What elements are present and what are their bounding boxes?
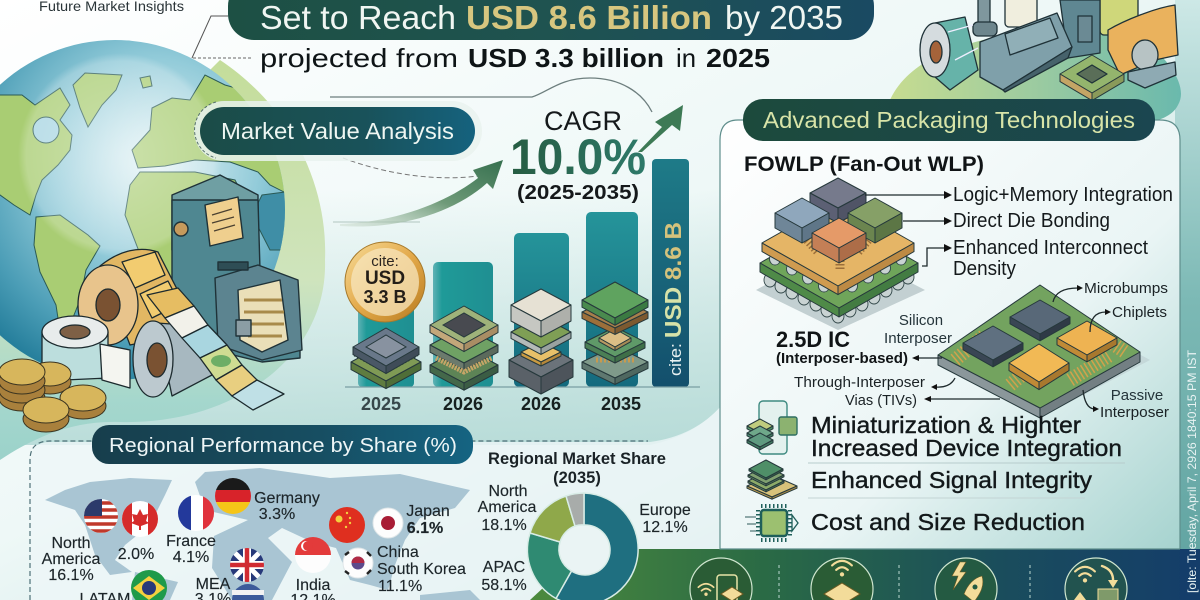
chip stack 2026 b	[509, 289, 573, 394]
divider	[1029, 565, 1031, 600]
segment: APAC	[527, 533, 572, 598]
orange hood	[1108, 5, 1178, 75]
globe backdrop blob	[0, 60, 325, 460]
growth arrow lower	[340, 160, 503, 227]
CAGR callout: 10.0%	[510, 129, 646, 185]
flag: USA	[84, 499, 118, 533]
donut chart	[527, 493, 638, 600]
title pill	[228, 0, 874, 40]
region labels: 4.1%	[173, 549, 209, 566]
interposer callouts: Through-Interposer	[794, 374, 925, 391]
interposer callouts: Vias (TIVs)	[845, 392, 917, 409]
footer icon 3	[935, 558, 997, 600]
coin stacks	[0, 359, 106, 432]
interposer callouts: Microbumps	[1084, 280, 1168, 297]
donut heading	[488, 450, 666, 487]
interposer callouts: Interposer	[1100, 404, 1169, 421]
region labels	[42, 490, 466, 600]
year labels: 2026	[521, 394, 561, 414]
footer band over panel edge	[1180, 549, 1200, 600]
icon: phone with chips	[747, 401, 797, 454]
subtitle: 2025	[706, 43, 770, 73]
Market Value Analysis heading	[194, 101, 482, 161]
flag: partial lower	[232, 584, 264, 600]
flag: Japan	[373, 508, 403, 538]
donut hole	[558, 524, 610, 576]
label rolls	[42, 249, 284, 410]
region labels: 16.1%	[48, 567, 94, 584]
timestamp note: [olte: Tuesday, April 7, 2926 1840:15 PM IST	[1185, 349, 1199, 593]
CAGR callout: CAGR	[544, 106, 622, 136]
flag: Brazil	[131, 570, 167, 600]
donut labels: 58.1%	[481, 577, 527, 594]
donut labels: APAC	[483, 559, 525, 576]
interposer chip diagram	[938, 285, 1150, 418]
coin value badge: 3.3 B	[363, 287, 407, 307]
region labels: India	[296, 577, 330, 594]
benefit: miniaturization: Increased Device Integration	[811, 435, 1122, 461]
coin value badge: USD	[365, 268, 405, 289]
packaging machine	[920, 0, 1178, 101]
donut labels: Europe	[639, 502, 691, 519]
interposer callouts: Silicon	[899, 312, 943, 329]
top-right machine backdrop	[888, 25, 1181, 125]
small white roll	[42, 316, 130, 388]
region labels: North	[51, 535, 91, 552]
right edge band	[1175, 0, 1200, 600]
FOWLP callouts	[865, 184, 1173, 280]
2.5D IC heading: (Interposer-based)	[776, 350, 908, 367]
chip stack 2025	[351, 328, 421, 389]
bar chart	[345, 159, 700, 414]
flag: Canada	[122, 501, 158, 537]
growth arrow upper	[638, 105, 683, 152]
interposer callouts: Chiplets	[1112, 304, 1167, 321]
segment: other	[566, 493, 584, 526]
footer band	[530, 549, 1200, 600]
region labels: 2.0%	[118, 546, 154, 563]
flag: Singapore	[295, 537, 331, 573]
donut labels: America	[478, 499, 536, 516]
world map	[45, 468, 480, 600]
region labels: France	[166, 533, 216, 550]
CAGR callout: (2025-2035)	[517, 182, 639, 204]
FOWLP callouts: Direct Die Bonding	[953, 210, 1110, 232]
divider	[778, 565, 780, 600]
region labels: America	[42, 551, 100, 568]
title text: by 2035	[725, 0, 843, 36]
year labels: 2026	[443, 394, 483, 414]
year labels: 2035	[601, 394, 641, 414]
flag: South Korea	[343, 548, 373, 578]
coin value badge	[345, 242, 425, 322]
panel: advanced packaging technologies	[720, 99, 1180, 549]
FOWLP chip diagram	[756, 178, 925, 330]
title text: Set to Reach	[260, 0, 456, 36]
teal label roll	[920, 17, 978, 90]
coin value badge: cite:	[371, 253, 399, 270]
donut labels: 12.1%	[642, 519, 688, 536]
region labels: Germany	[254, 490, 320, 507]
divider	[898, 565, 900, 600]
flag: UK	[230, 548, 264, 582]
interposer callouts	[794, 280, 1169, 421]
lower tint	[0, 190, 722, 445]
icon: layered stack	[747, 460, 797, 499]
title text: USD 8.6 Billion	[466, 0, 712, 36]
benefit: cost and size: Cost and Size Reduction	[811, 509, 1085, 535]
donut labels	[478, 483, 691, 594]
chip stack 2026	[430, 306, 498, 390]
interposer callouts: Passive	[1111, 387, 1163, 404]
donut heading: Regional Market Share	[488, 450, 666, 468]
FOWLP heading: FOWLP (Fan-Out WLP)	[744, 153, 984, 176]
benefit: signal integrity: Enhanced Signal Integrity	[811, 467, 1092, 493]
small chip	[1060, 55, 1124, 101]
interposer callouts: Interposer	[884, 330, 952, 347]
footer icon 4	[1065, 558, 1127, 600]
region labels: 6.1%	[407, 520, 443, 537]
Market Value Analysis heading: Market Value Analysis	[221, 118, 454, 144]
region labels: MEA	[196, 576, 231, 593]
2.5D IC heading: 2.5D IC	[776, 327, 850, 352]
subtitle: projected from	[260, 43, 458, 73]
donut labels: 18.1%	[481, 517, 527, 534]
subtitle: in	[676, 43, 696, 73]
footer icon 1	[690, 558, 752, 600]
chip stack 2035	[582, 282, 648, 384]
flag: Germany	[215, 478, 251, 514]
label strip	[147, 288, 284, 410]
year labels	[361, 394, 641, 414]
FOWLP callouts: Enhanced Interconnect	[953, 237, 1148, 259]
FOWLP callouts: Logic+Memory Integration	[953, 184, 1173, 206]
label printing machine	[172, 175, 302, 362]
subtitle: USD 3.3 billion	[468, 43, 664, 73]
value label on 2035 bar: cite: USD 8.6 B	[660, 222, 686, 376]
flag: China	[329, 507, 365, 543]
region labels: South Korea	[377, 561, 466, 578]
panel: advanced packaging technologies: Advanced Packaging Technologies	[763, 107, 1135, 133]
benefit: miniaturization: Miniaturization & Highter	[811, 412, 1081, 438]
segment: North America	[530, 496, 575, 542]
donut heading: (2035)	[553, 469, 601, 487]
heading pill	[92, 425, 473, 464]
flag: France	[178, 495, 215, 531]
heading pill	[743, 99, 1155, 141]
CAGR frame line	[330, 78, 652, 112]
panel: regional performance: Regional Performance by Share (%)	[109, 435, 457, 457]
yellow roll	[78, 249, 198, 345]
region labels: China	[377, 544, 419, 561]
panel: regional performance	[30, 405, 722, 600]
year labels: 2025	[361, 394, 401, 414]
region labels: 3.3%	[259, 506, 295, 523]
region labels: 11.1%	[378, 578, 422, 595]
CAGR callout	[510, 106, 646, 204]
donut labels: North	[488, 483, 528, 500]
icon: chip	[745, 506, 798, 540]
title text	[260, 0, 843, 36]
silver roll	[133, 321, 212, 397]
solder balls upper	[770, 253, 906, 292]
benefit: miniaturization	[811, 412, 1122, 461]
solder balls lower	[764, 270, 914, 323]
segment: main	[556, 493, 638, 600]
dashed connector	[343, 158, 478, 178]
globe	[0, 40, 300, 380]
2.5D IC heading	[776, 327, 908, 367]
leader line	[192, 16, 228, 58]
footer icon 2	[811, 558, 873, 600]
subtitle	[260, 43, 770, 73]
region labels: Japan	[406, 503, 450, 520]
continents	[0, 72, 285, 318]
FOWLP callouts: Density	[953, 258, 1016, 280]
